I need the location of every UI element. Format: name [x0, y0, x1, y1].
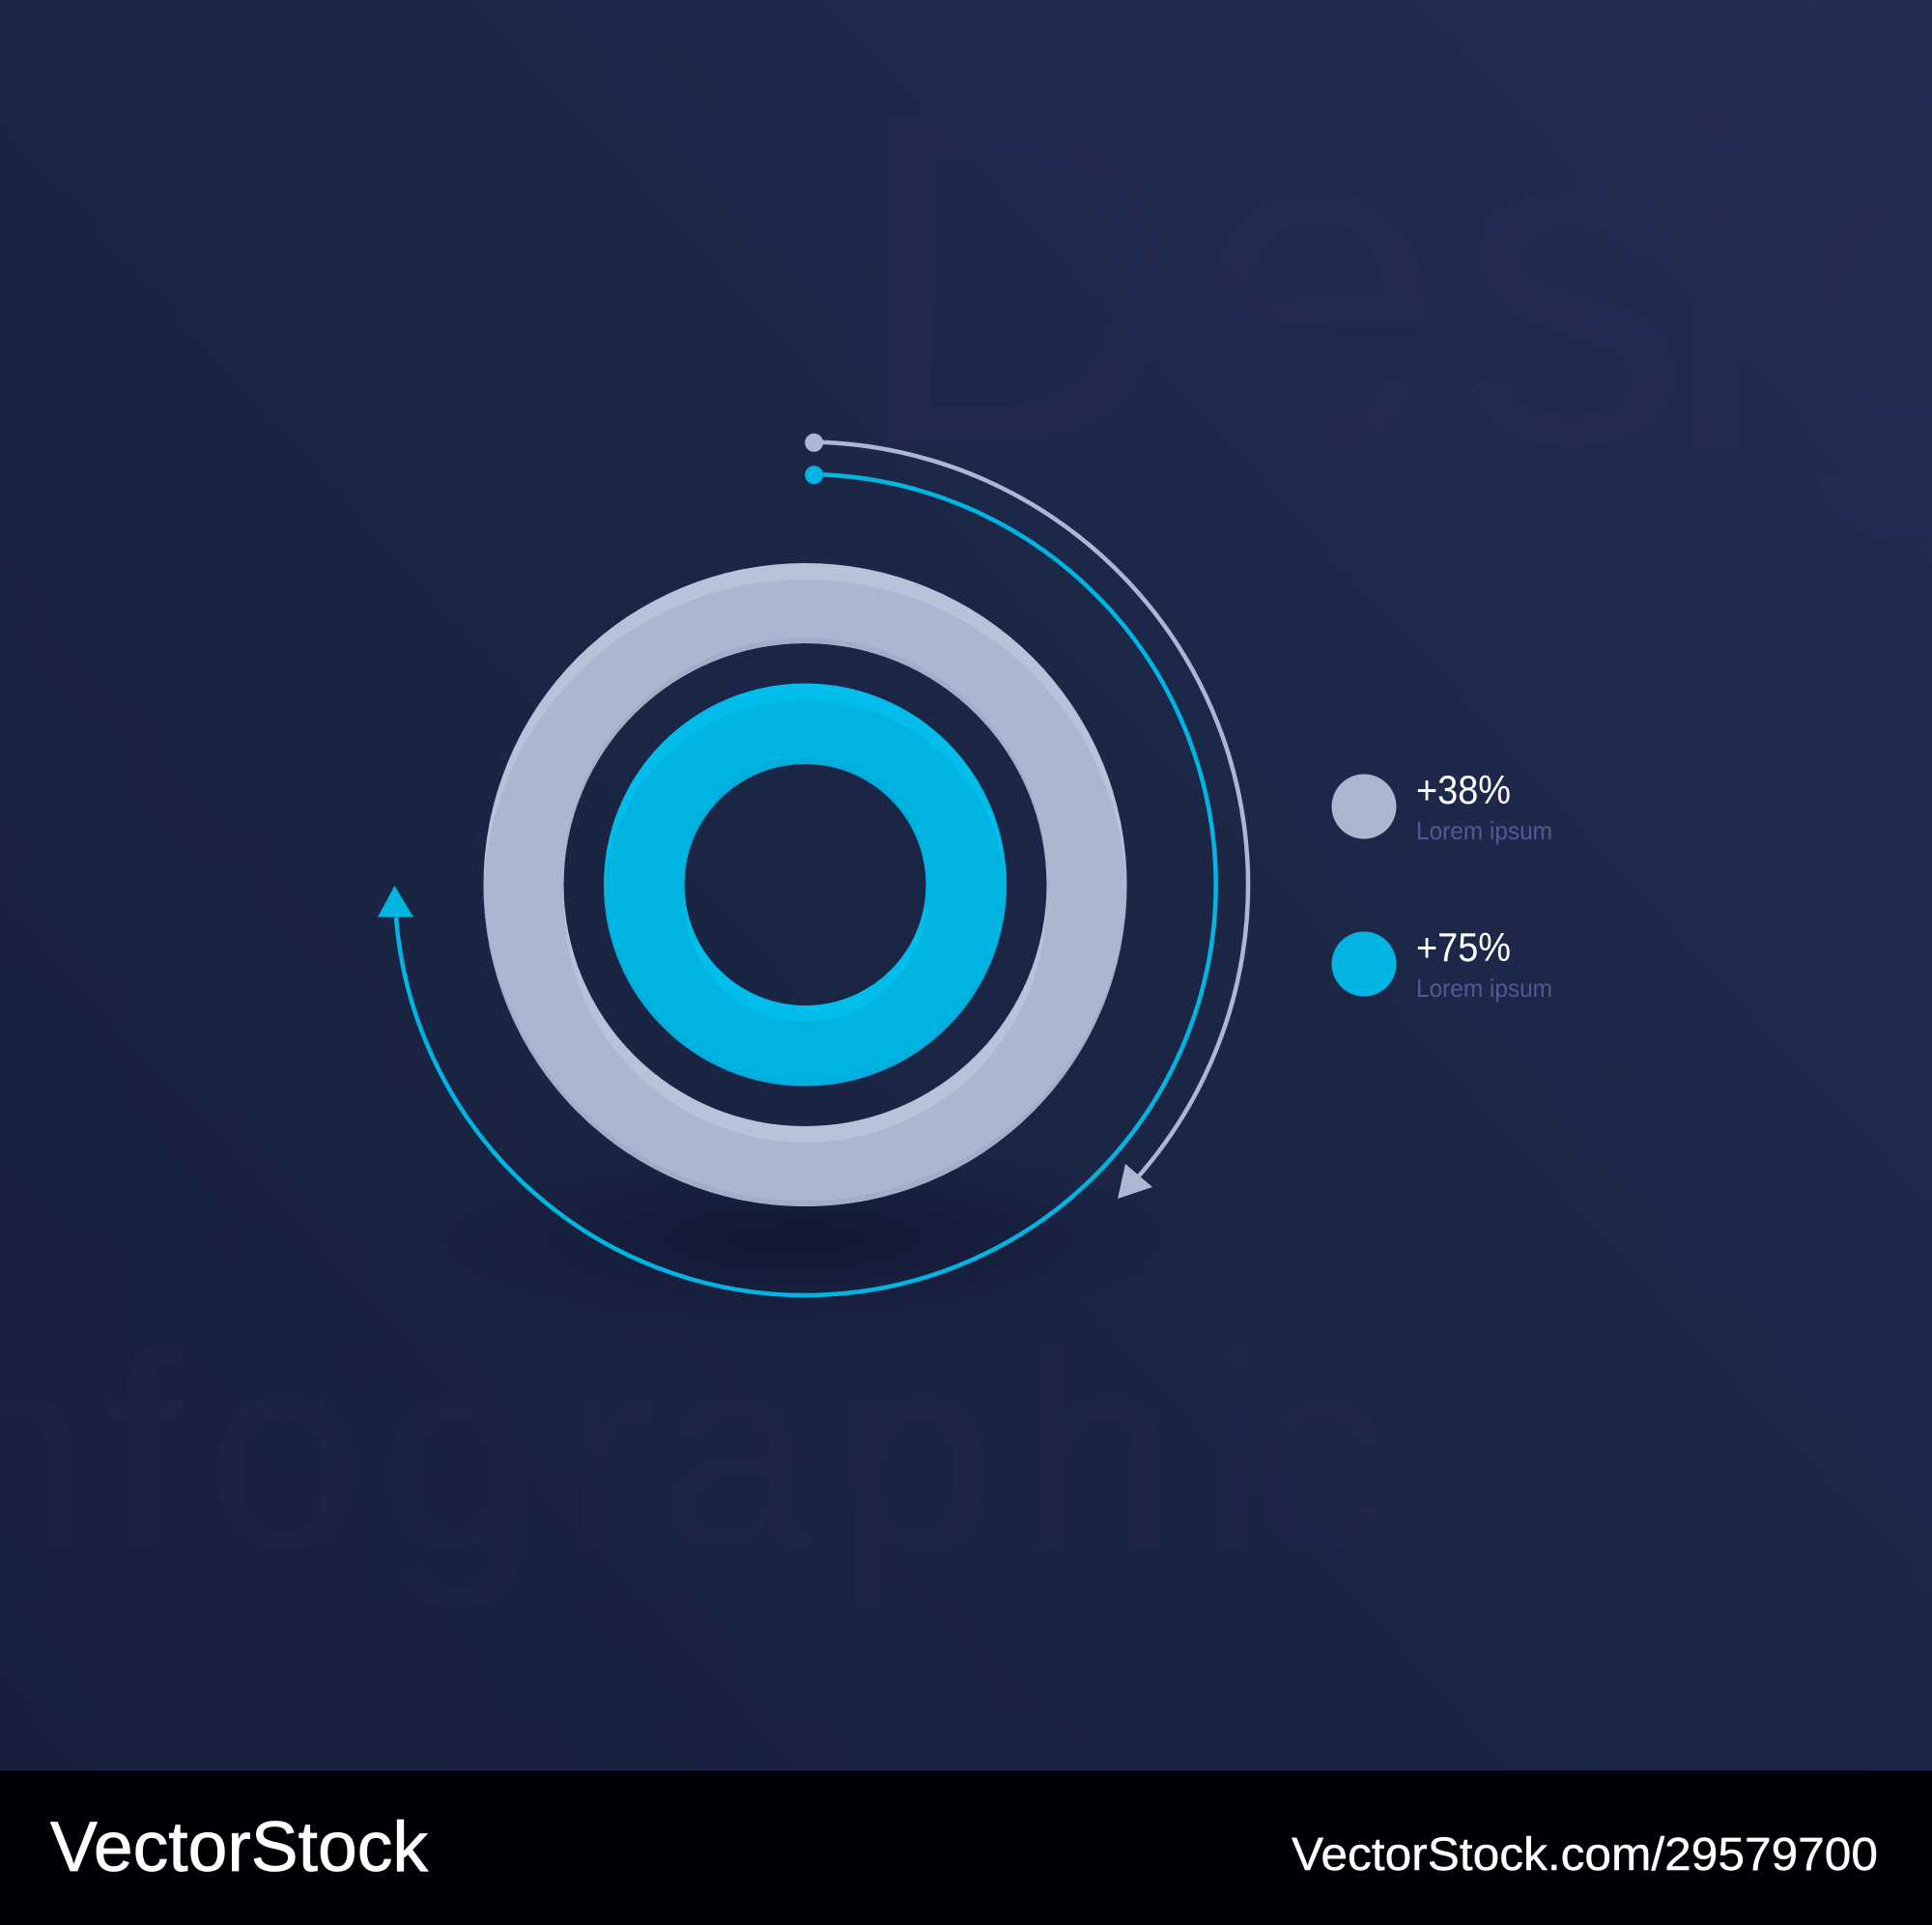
disc shadow — [415, 1137, 1188, 1340]
arrow: grey arc — [805, 434, 1248, 1199]
legend item: 38% — [1331, 767, 1552, 845]
footer logo text: VectorStock — [50, 1808, 428, 1886]
inner ring: cyan — [604, 684, 1007, 1086]
arrow: cyan arc — [378, 466, 1216, 1295]
outer ring: grey — [473, 551, 1140, 1217]
legend item: 38%: Lorem ipsum — [1416, 816, 1552, 845]
footer url text: VectorStock.com/29579700 — [1292, 1829, 1878, 1881]
legend item: 75%: Lorem ipsum — [1416, 974, 1552, 1003]
legend item: 38%: +38% — [1416, 767, 1511, 812]
legend item: 75%: +75% — [1416, 924, 1511, 970]
donut chart — [473, 551, 1140, 1217]
footer bar — [0, 1770, 1932, 1925]
legend item: 75% — [1331, 924, 1552, 1003]
